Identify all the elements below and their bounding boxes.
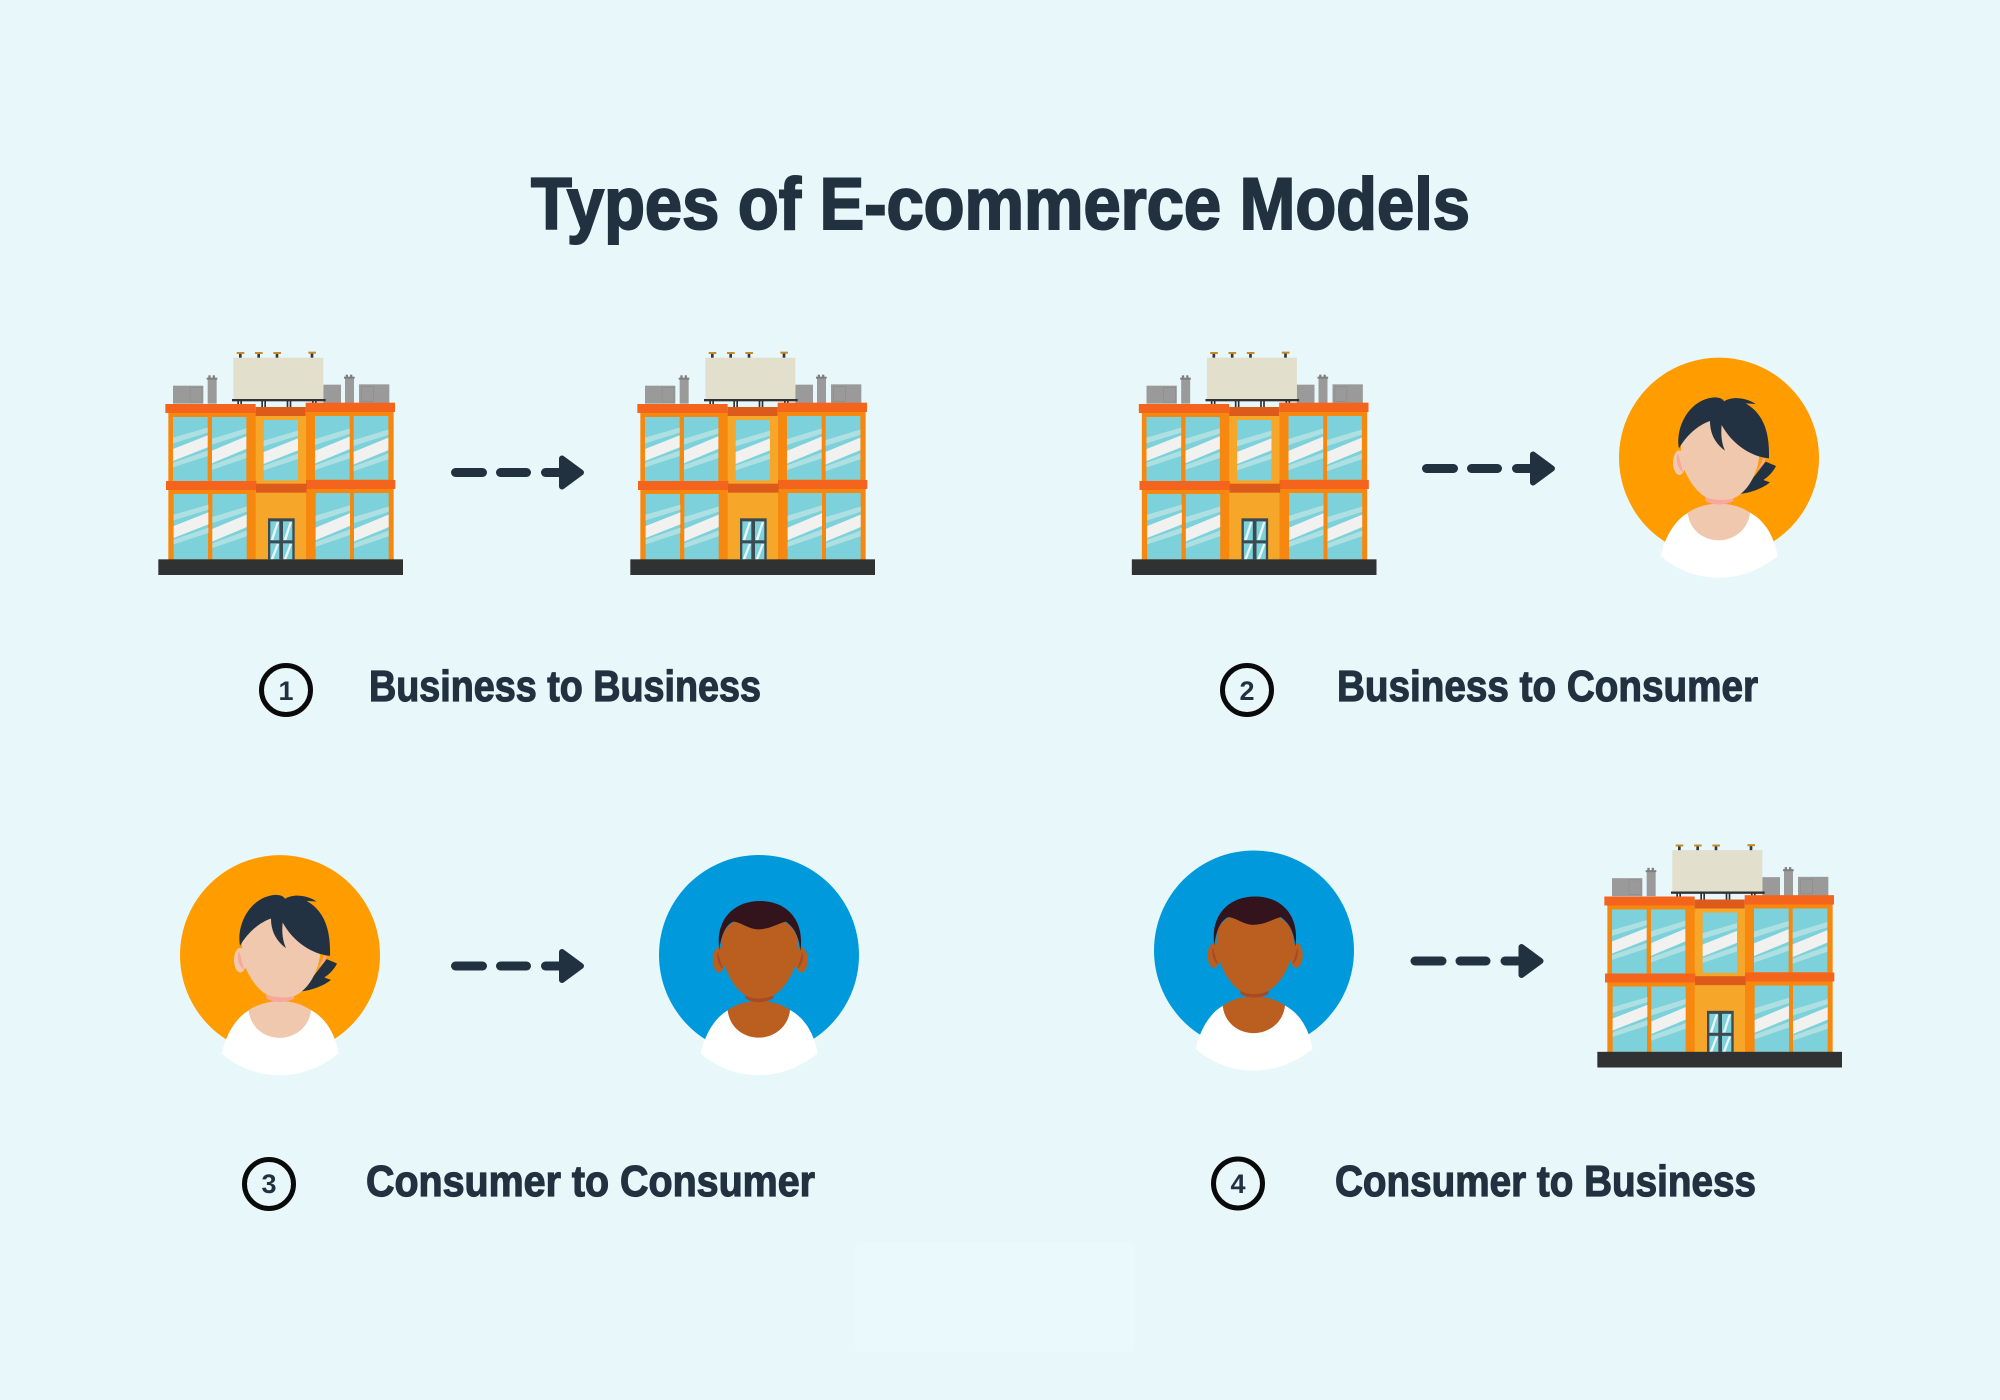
arrow: consumer to consumer <box>451 952 581 980</box>
number badge 1 <box>262 666 310 714</box>
title: Types of E-commerce Models <box>531 164 1470 245</box>
arrow: consumer to business <box>1410 947 1540 975</box>
arrow: business to business <box>451 458 581 486</box>
number badge 2: 2 <box>1239 676 1255 706</box>
arrow: business to consumer <box>1422 454 1552 482</box>
icon: woman consumer <box>1619 358 1819 578</box>
number badge 2 <box>1222 666 1272 714</box>
icon: business building <box>1132 352 1376 575</box>
label: business to consumer: Business to Consumer <box>1337 662 1758 711</box>
icon: buyer building <box>630 352 875 575</box>
icon: man consumer <box>1154 850 1354 1070</box>
number badge 3: 3 <box>261 1169 277 1199</box>
icon: woman consumer <box>180 855 380 1075</box>
panel: consumer to business <box>1154 844 1842 1208</box>
icon: business building <box>1597 844 1842 1067</box>
label: business to business: Business to Business <box>369 662 761 711</box>
panel: business to business <box>158 352 875 714</box>
label: consumer to consumer: Consumer to Consumer <box>366 1157 815 1206</box>
number badge 4: 4 <box>1230 1169 1246 1199</box>
number badge 1: 1 <box>278 676 294 706</box>
icon: seller building <box>158 352 403 575</box>
panel: business to consumer <box>1132 352 1819 714</box>
number badge 4 <box>1214 1159 1262 1208</box>
panel: consumer to consumer <box>180 855 859 1208</box>
number badge 3 <box>244 1160 294 1208</box>
icon: man consumer <box>659 855 859 1075</box>
label: consumer to business: Consumer to Business <box>1335 1157 1756 1206</box>
